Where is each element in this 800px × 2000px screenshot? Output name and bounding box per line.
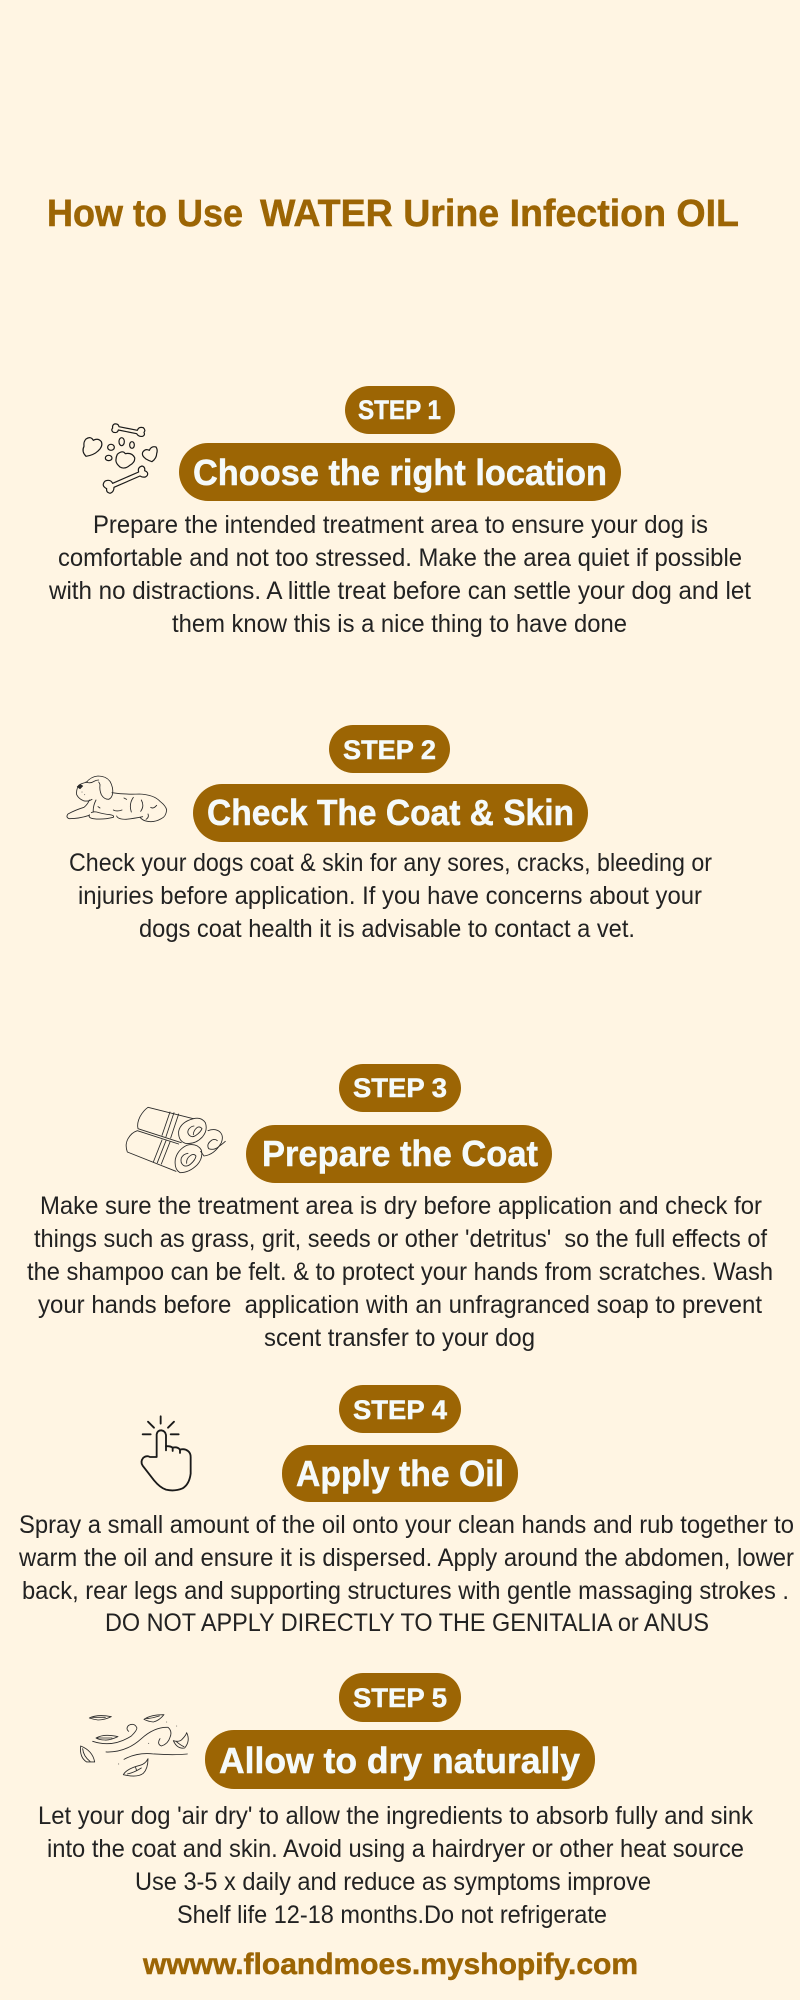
title <box>47 193 739 235</box>
panel: step 5 <box>38 1673 753 1929</box>
step 1 text <box>48 511 751 638</box>
step 3 text: the shampoo can be felt. & to protect your hands from scratches. Wash <box>27 1258 773 1286</box>
step 2 heading <box>193 784 588 842</box>
icon: wind and leaves <box>80 1715 188 1776</box>
step 3 text: your hands before application with an unfragranced soap to prevent <box>38 1291 762 1319</box>
step 1 text: comfortable and not too stressed. Make the area quiet if possible <box>58 544 742 572</box>
step 3 text: Make sure the treatment area is dry before application and check for <box>40 1192 762 1220</box>
step 1 text: with no distractions. A little treat before can settle your dog and let <box>48 577 751 605</box>
step 4 badge <box>339 1385 461 1433</box>
panel: step 1 <box>48 386 751 638</box>
step 2 text <box>69 849 712 943</box>
step 2 heading: Check The Coat & Skin <box>207 792 574 833</box>
step 1 badge <box>345 386 455 434</box>
step 2 text: Check your dogs coat & skin for any sores, cracks, bleeding or <box>69 849 712 877</box>
step 3 badge: STEP 3 <box>353 1073 447 1103</box>
panel: step 4 <box>18 1385 794 1637</box>
step 2 text: dogs coat health it is advisable to contact a vet. <box>139 915 635 943</box>
icon: tapping hand <box>141 1416 191 1490</box>
step 3 text: things such as grass, grit, seeds or other 'detritus' so the full effects of <box>34 1225 767 1253</box>
panel: step 2 <box>67 725 712 943</box>
step 1 badge: STEP 1 <box>358 395 441 425</box>
icon: paw and bones <box>83 424 157 493</box>
step 5 text: into the coat and skin. Avoid using a hairdryer or other heat source <box>47 1835 744 1863</box>
step 5 badge: STEP 5 <box>353 1683 447 1713</box>
step 3 text: scent transfer to your dog <box>264 1324 535 1352</box>
step 2 text: injuries before application. If you have concerns about your <box>78 882 702 910</box>
step 3 heading <box>246 1125 552 1183</box>
step 5 heading <box>205 1730 595 1789</box>
step 5 text: Let your dog 'air dry' to allow the ingredients to absorb fully and sink <box>38 1802 753 1830</box>
step 1 heading: Choose the right location <box>193 452 607 493</box>
step 5 text: Shelf life 12-18 months.Do not refrigerate <box>177 1901 607 1929</box>
step 4 heading <box>282 1445 518 1502</box>
step 1 text: Prepare the intended treatment area to ensure your dog is <box>93 511 708 539</box>
panel: step 3 <box>27 1064 773 1352</box>
icon: rolled towels <box>126 1107 225 1173</box>
step 4 badge: STEP 4 <box>353 1395 447 1425</box>
step 5 text <box>38 1802 753 1929</box>
step 4 text: DO NOT APPLY DIRECTLY TO THE GENITALIA or ANUS <box>105 1609 709 1637</box>
step 3 badge <box>339 1064 461 1112</box>
step 2 badge <box>329 725 450 773</box>
step 5 text: Use 3-5 x daily and reduce as symptoms improve <box>135 1868 651 1896</box>
step 4 heading: Apply the Oil <box>296 1453 504 1494</box>
title: How to Use <box>47 193 243 235</box>
step 1 text: them know this is a nice thing to have done <box>172 610 627 638</box>
step 3 text <box>27 1192 773 1352</box>
step 5 heading: Allow to dry naturally <box>219 1740 580 1781</box>
step 3 heading: Prepare the Coat <box>262 1133 538 1174</box>
title: WATER Urine Infection OIL <box>260 193 739 235</box>
step 4 text <box>18 1511 794 1637</box>
step 5 badge <box>339 1673 461 1722</box>
icon: resting dog <box>67 776 167 822</box>
step 1 heading <box>179 443 621 501</box>
step 2 badge: STEP 2 <box>343 735 436 765</box>
footer website link: wwww.floandmoes.myshopify.com <box>142 1948 638 1981</box>
